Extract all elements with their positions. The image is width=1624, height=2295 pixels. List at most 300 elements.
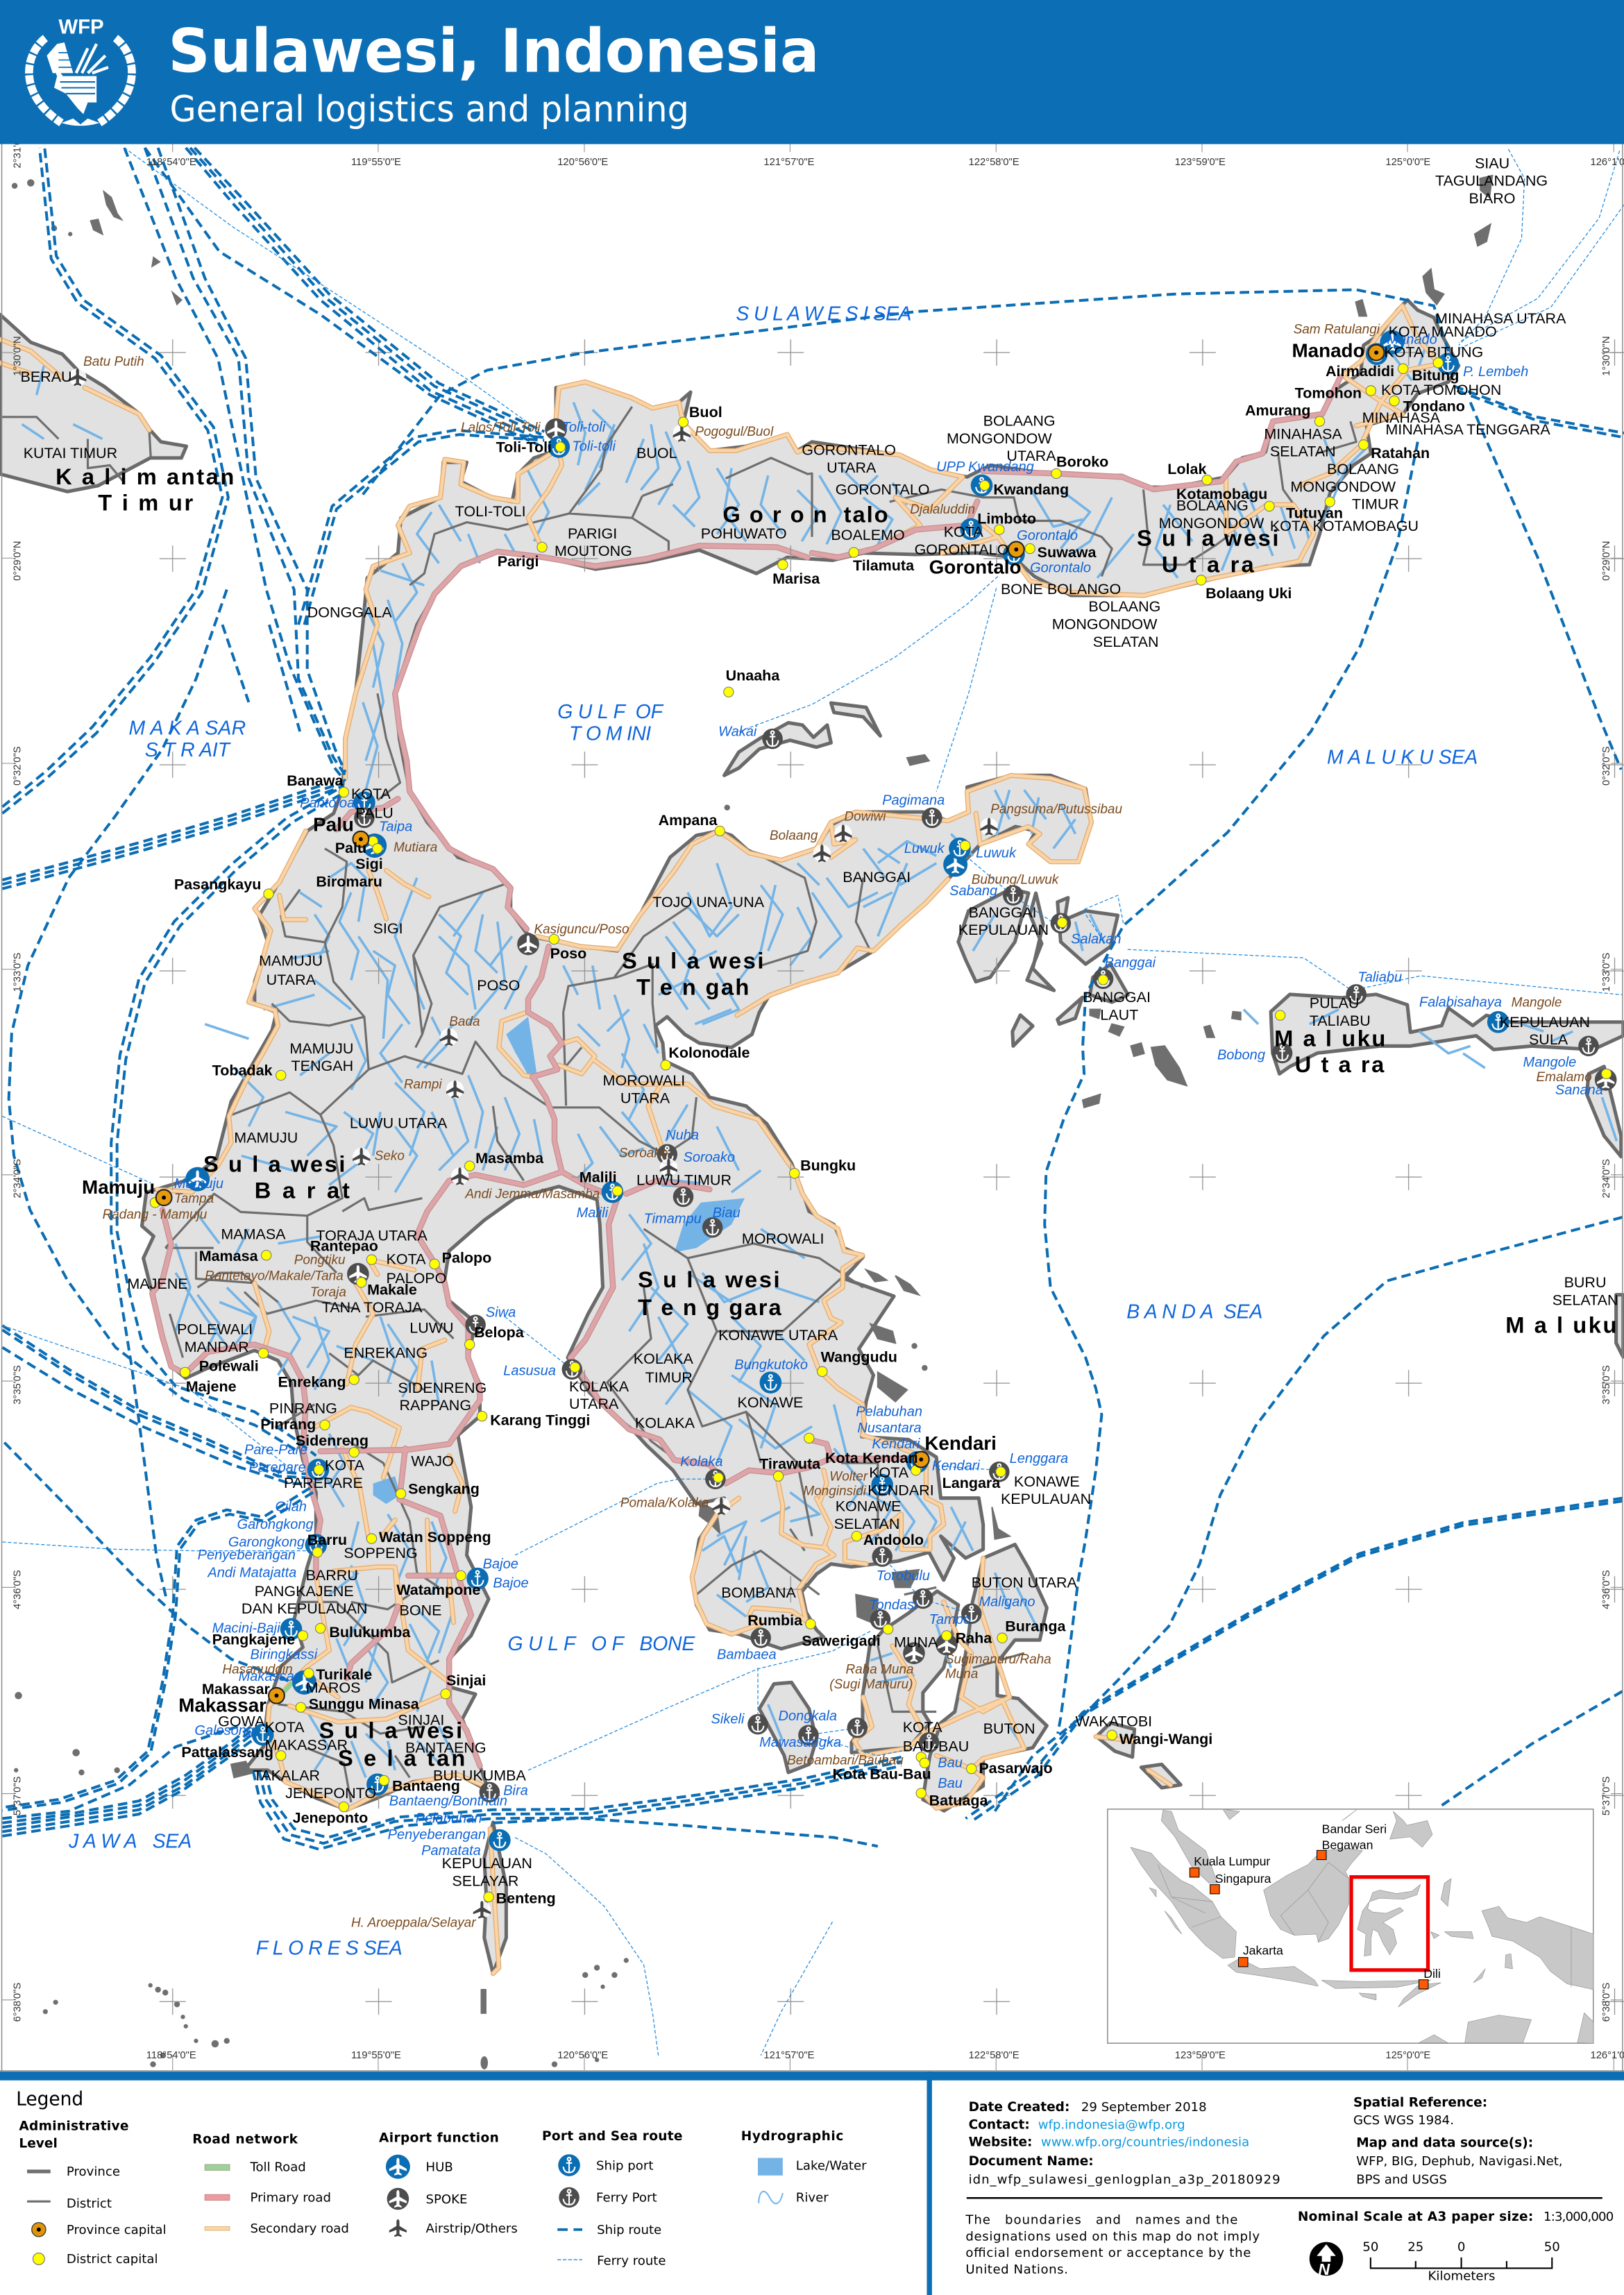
port labels: Biringkassi <box>250 1648 318 1663</box>
inset red extent box <box>1351 1877 1428 1970</box>
airport labels: H. Aroeppala/Selayar <box>351 1915 476 1930</box>
district labels: MAROS <box>306 1679 360 1696</box>
town labels: Langara <box>942 1475 1001 1491</box>
inset labels: Begawan <box>1322 1838 1373 1852</box>
graticule labels: 121°57'0"E <box>763 157 815 168</box>
district labels: MOROWALI <box>603 1072 685 1089</box>
graticule labels: 2°34'0"S <box>12 1159 24 1199</box>
town labels: Rantepao <box>310 1237 378 1254</box>
contact: Contact: <box>969 2117 1030 2132</box>
port labels: Manado <box>1387 332 1437 347</box>
airport labels: Kasiguncu/Poso <box>534 922 629 937</box>
district labels: WAKATOBI <box>1075 1713 1152 1730</box>
graticule labels: 125°0'0"E <box>1385 157 1430 168</box>
airport labels: Rantetayo/Makale/Tana <box>205 1269 344 1284</box>
graticule labels: 1°33'0"S <box>1601 953 1612 992</box>
spatial reference: GCS WGS 1984. <box>1353 2113 1454 2128</box>
data sources <box>1356 2136 1563 2187</box>
legend: hydrographic: Lake/Water <box>796 2158 867 2173</box>
port labels: Toli-toli <box>572 439 616 454</box>
district labels: GORONTALO <box>915 541 1008 558</box>
port labels <box>174 332 1603 1858</box>
district labels: MINAHASA UTARA <box>1435 310 1566 327</box>
port labels: Lasusua <box>503 1364 556 1379</box>
province names: T e n g gara <box>638 1294 782 1320</box>
ship ports <box>252 343 1509 1851</box>
legend heading: Legend <box>16 2089 83 2110</box>
port labels: Nusantara <box>857 1421 922 1436</box>
district labels: BANGGAI <box>1083 989 1151 1006</box>
district labels: PINRANG <box>269 1400 337 1416</box>
district labels: MONGONDOW <box>1052 616 1158 632</box>
town labels: Batuaga <box>929 1792 989 1809</box>
hub airports <box>185 330 1404 1695</box>
legend: road network: Toll Road <box>249 2160 306 2174</box>
date created <box>969 2100 1207 2115</box>
port labels: P. Lembeh <box>1463 364 1528 380</box>
town labels: Pasangkayu <box>174 876 261 893</box>
district labels: LAUT <box>1100 1006 1138 1023</box>
district labels: GOWA <box>218 1713 265 1730</box>
town labels: Unaaha <box>726 667 780 684</box>
district labels: PALOPO <box>387 1270 446 1287</box>
town labels: Sawerigadi <box>802 1633 881 1650</box>
district labels: MONGONDOW <box>1290 478 1396 495</box>
district labels: MINAHASA TENGGARA <box>1385 421 1550 438</box>
province names: S e l a tan <box>338 1745 465 1770</box>
town labels: Malili <box>580 1169 617 1185</box>
data sources: WFP, BIG, Dephub, Navigasi.Net, <box>1356 2154 1563 2169</box>
town labels: Andoolo <box>863 1532 924 1548</box>
port labels: Makassar <box>239 1669 300 1684</box>
district labels: TIMUR <box>1352 496 1399 513</box>
town labels: Belopa <box>474 1324 525 1341</box>
port labels: Timampu <box>644 1211 702 1226</box>
graticule labels: 122°58'0"E <box>969 157 1020 168</box>
document name <box>969 2154 1280 2187</box>
airport labels: Monginsidi <box>803 1484 867 1498</box>
town labels: Karang Tinggi <box>490 1412 590 1428</box>
port labels: Luwuk <box>904 841 945 856</box>
town labels: Rumbia <box>747 1612 803 1629</box>
district and province boundaries <box>0 407 1356 1802</box>
district labels: BONE BOLANGO <box>1001 581 1121 598</box>
sea names: B A N D A SEA <box>1126 1301 1262 1323</box>
district labels: MONGONDOW <box>1159 515 1264 532</box>
sea names: M A L U K U SEA <box>1327 746 1478 768</box>
town labels: Amurang <box>1245 403 1310 419</box>
district labels: KOTA <box>387 1251 426 1267</box>
town labels: Buranga <box>1005 1618 1067 1635</box>
port labels: Siwa <box>486 1305 516 1320</box>
graticule labels: 122°58'0"E <box>969 2050 1020 2061</box>
district labels: TORAJA UTARA <box>316 1228 428 1244</box>
inset labels: Dili <box>1423 1967 1441 1981</box>
airport labels: Muna <box>945 1667 978 1682</box>
icon: WFP logo: WFP <box>58 15 104 38</box>
district labels: BONE <box>400 1602 441 1618</box>
data sources: BPS and USGS <box>1356 2172 1447 2187</box>
town labels: Palu <box>335 840 366 856</box>
district labels: KOLAKA <box>635 1415 695 1432</box>
port labels: Soroako <box>683 1150 735 1165</box>
district labels: MANDAR <box>185 1339 249 1355</box>
town labels: Polewali <box>199 1357 259 1374</box>
province names: U t a ra <box>1295 1051 1385 1077</box>
legend: airport function: SPOKE <box>425 2192 467 2207</box>
graticule labels: 1°33'0"S <box>12 953 24 992</box>
inset land <box>1131 1809 1593 2043</box>
scale bar <box>1362 2239 1560 2283</box>
town labels: Buol <box>689 404 722 421</box>
district labels: MUNA <box>894 1634 938 1651</box>
subtitle: General logistics and planning <box>170 89 689 130</box>
port labels: Pelabuhan <box>416 1811 482 1827</box>
province names: M a l uku <box>1505 1312 1616 1337</box>
legend: administrative level: Level <box>19 2137 58 2151</box>
town labels: Bitung <box>1412 367 1459 384</box>
town labels: Tutuyan <box>1286 505 1343 521</box>
port labels: Dongkala <box>779 1709 837 1724</box>
district labels: PANGKAJENE <box>255 1583 354 1600</box>
airport labels: Wolter <box>829 1469 868 1484</box>
legend: port and sea route: Ship route <box>597 2223 661 2237</box>
town labels: Bungku <box>800 1157 856 1174</box>
title: Sulawesi, Indonesia <box>168 17 820 86</box>
nominal scale: 1:3,000,000 <box>1543 2210 1614 2224</box>
port labels: Nuha <box>666 1128 699 1143</box>
scale bar: 0 <box>1457 2239 1465 2254</box>
district labels: MINAHASA <box>1264 425 1342 442</box>
town labels: Majene <box>186 1378 237 1395</box>
disclaimer: official endorsement or acceptance by the <box>965 2246 1251 2260</box>
airport labels: Raha Muna <box>845 1663 914 1677</box>
graticule labels: 1°30'0"N <box>12 336 24 376</box>
port labels: Banggai <box>1105 955 1156 970</box>
district labels: SULA <box>1529 1031 1568 1048</box>
district labels: SELATAN <box>1093 634 1159 650</box>
district labels: SINJAI <box>398 1711 444 1728</box>
port labels: Bobong <box>1217 1047 1265 1062</box>
town labels: Limboto <box>977 511 1036 527</box>
port labels: Galesong <box>194 1723 254 1738</box>
province capital labels: Palu <box>313 813 354 835</box>
graticule labels: 118°54'0"E <box>146 2050 196 2061</box>
airport labels: Pomala/Kolaka <box>620 1496 709 1510</box>
town labels: Pinrang <box>260 1416 316 1433</box>
graticule labels: 2°31'0"N <box>12 128 24 168</box>
district labels: KOTA TOMOHON <box>1381 382 1501 398</box>
sea names: M A K A SAR <box>129 717 246 739</box>
district labels: BULUKUMBA <box>433 1768 526 1784</box>
district labels: BOMBANA <box>721 1584 796 1601</box>
inset labels: Jakarta <box>1243 1943 1283 1957</box>
town labels: Wanggudu <box>821 1349 897 1366</box>
port labels: Pamatata <box>421 1843 481 1858</box>
district labels: PAREPARE <box>284 1475 363 1491</box>
port labels: Luwuk <box>976 845 1017 861</box>
district labels: POSO <box>477 977 520 994</box>
district labels: SELATAN <box>834 1516 899 1532</box>
town labels: Sigi <box>355 856 383 872</box>
graticule labels: 4°36'0"S <box>12 1570 24 1609</box>
district labels: KOTA MANADO <box>1389 323 1497 340</box>
port labels: Tampo <box>929 1612 971 1627</box>
district labels: BUTON <box>983 1720 1035 1737</box>
legend: airport function: Airport function <box>379 2131 499 2145</box>
port labels: Malili <box>577 1205 609 1221</box>
town labels: Sidenreng <box>296 1432 369 1449</box>
panel: legend <box>16 2089 867 2268</box>
port labels: Pelabuhan <box>856 1405 922 1420</box>
rivers <box>22 344 1616 1777</box>
port labels: Kolaka <box>680 1454 722 1469</box>
sea names: F L O R E S SEA <box>256 1937 403 1959</box>
district labels: LUWU TIMUR <box>636 1172 731 1189</box>
town labels: Banawa <box>287 772 344 789</box>
town labels: Tondano <box>1403 398 1465 414</box>
district labels: KONAWE <box>836 1498 902 1515</box>
district labels: KEPULAUAN <box>1001 1491 1091 1507</box>
district labels: POHUWATO <box>701 525 787 542</box>
airport labels: Emalamo <box>1537 1070 1592 1085</box>
legend: port and sea route <box>542 2129 682 2268</box>
airport labels: Toraja <box>310 1285 346 1300</box>
district labels: MONGONDOW <box>947 430 1052 447</box>
district labels: BAU-BAU <box>903 1738 969 1754</box>
graticule labels: 123°59'0"E <box>1175 157 1226 168</box>
district labels: BOLAANG <box>1327 461 1399 477</box>
district labels: MOROWALI <box>742 1230 824 1247</box>
district labels: DONGGALA <box>307 604 392 621</box>
inset locator map <box>1108 1809 1593 2043</box>
district labels: DAN KEPULAUAN <box>242 1600 367 1617</box>
district labels: UTARA <box>569 1396 619 1412</box>
inset labels <box>1194 1822 1441 1981</box>
district labels: KOTA KOTAMOBAGU <box>1270 518 1419 534</box>
airport labels: (Sugi Manuru) <box>829 1677 913 1692</box>
district labels: UTARA <box>267 972 316 988</box>
airport labels: Betoambari/Baubau <box>787 1753 904 1768</box>
inset capital markers <box>1190 1850 1428 1989</box>
district labels: KOLAKA <box>569 1378 629 1395</box>
district labels: WAJO <box>411 1453 454 1469</box>
graticule labels: 120°56'0"E <box>557 157 608 168</box>
port labels: Penyeberangan <box>388 1827 486 1843</box>
port labels: Kendari <box>932 1459 980 1474</box>
town labels: Mamasa <box>199 1248 259 1264</box>
town labels: Bulukumba <box>329 1624 411 1641</box>
town labels: Parigi <box>498 553 539 570</box>
town labels: Masamba <box>475 1150 544 1167</box>
legend: administrative level: Province <box>67 2165 120 2179</box>
port labels: Mamuju <box>174 1176 223 1192</box>
province names: B a r at <box>255 1178 350 1203</box>
legend: hydrographic <box>741 2129 867 2205</box>
district labels: MAJENE <box>127 1276 188 1292</box>
district labels: BOALEMO <box>831 527 905 543</box>
port labels: Parepare <box>248 1460 306 1475</box>
legend: airport function: Airstrip/Others <box>425 2221 518 2236</box>
district labels: MOUTONG <box>555 543 632 559</box>
airport labels: Hasanuddin <box>222 1663 293 1677</box>
port labels: Maligano <box>979 1595 1035 1610</box>
graticule labels: 120°56'0"E <box>557 2050 608 2061</box>
town labels: Pattalassang <box>181 1744 273 1761</box>
disclaimer <box>965 2212 1260 2277</box>
town labels: Palopo <box>442 1249 491 1266</box>
document name: idn_wfp_sulawesi_genlogplan_a3p_20180929 <box>969 2172 1280 2187</box>
district labels: KENDARI <box>868 1482 934 1498</box>
province names: U t a ra <box>1162 551 1254 577</box>
scale bar: 50 <box>1544 2239 1560 2254</box>
town labels: Poso <box>550 945 586 962</box>
scale bar: Kilometers <box>1428 2269 1495 2283</box>
port labels: Mawasangka <box>759 1735 841 1750</box>
district labels <box>21 155 1618 1889</box>
town labels: Benteng <box>496 1890 556 1907</box>
airstrips <box>69 369 998 1919</box>
province names: T i m ur <box>98 490 194 516</box>
district labels: KONAWE <box>737 1394 803 1411</box>
port labels: Penyeberangan <box>198 1548 296 1563</box>
airport labels: Bubung/Luwuk <box>972 872 1060 887</box>
town labels: Tomohon <box>1295 384 1362 401</box>
town labels: Boroko <box>1056 453 1108 470</box>
port labels: Mangole <box>1523 1055 1576 1070</box>
district labels: ENREKANG <box>344 1344 428 1361</box>
ship routes <box>2 148 1624 1849</box>
legend: port and sea route: Port and Sea route <box>542 2129 682 2144</box>
airport labels: Bolaang <box>770 829 818 843</box>
province capital labels: Makassar <box>178 1694 267 1716</box>
district labels: UTARA <box>827 459 877 476</box>
graticule labels: 6°38'0"S <box>12 1983 24 2022</box>
port labels: Bajoe <box>483 1557 518 1572</box>
district labels: JENEPONTO <box>285 1785 376 1802</box>
nominal scale: Nominal Scale at A3 paper size: <box>1298 2210 1533 2224</box>
district labels: SIAU <box>1475 155 1509 171</box>
airport labels: Andi Jemma/Masamba <box>464 1187 600 1202</box>
district labels: MAMASA <box>221 1226 286 1243</box>
town labels: Watan Soppeng <box>379 1529 491 1545</box>
district labels: MINAHASA <box>1362 409 1441 426</box>
graticule labels: 119°55'0"E <box>351 157 401 168</box>
airport labels: Radang - Mamuju <box>103 1208 208 1222</box>
graticule labels: 4°36'0"S <box>1601 1570 1612 1609</box>
district labels: KUTAI TIMUR <box>24 445 117 461</box>
airport labels: Djalaluddin <box>910 502 975 517</box>
sea names: G U L F O F BONE <box>508 1633 695 1655</box>
sea names: G U L F OF <box>557 701 664 723</box>
district labels: KEPULAUAN <box>442 1855 532 1872</box>
contact <box>969 2117 1185 2132</box>
sea names <box>68 303 1478 1959</box>
Sulawesi mainland <box>142 300 1459 1810</box>
legend: road network: Secondary road <box>250 2221 349 2236</box>
footer band <box>0 2072 1624 2081</box>
legend: administrative level: District capital <box>67 2252 158 2267</box>
town labels: Kolonodale <box>668 1044 750 1061</box>
port labels: Bambaea <box>717 1648 777 1663</box>
port labels: Pantoloan <box>300 796 362 811</box>
airport labels: Lalos/Toli-Toli <box>461 421 541 435</box>
airport labels: Soroako <box>619 1146 668 1161</box>
airport labels <box>83 323 1592 1930</box>
district capitals <box>150 358 1612 1902</box>
legend: port and sea route: Ferry route <box>597 2253 666 2268</box>
graticule labels: 123°59'0"E <box>1175 2050 1226 2061</box>
town labels: Tirawuta <box>759 1456 821 1473</box>
graticule labels: 0°29'0"N <box>12 541 24 581</box>
port labels: Garongkong <box>237 1517 314 1532</box>
inset labels: Bandar Seri <box>1322 1822 1387 1836</box>
scale bar: 50 <box>1362 2239 1378 2254</box>
port labels: Lenggara <box>1010 1451 1068 1466</box>
district labels: KOTA <box>944 524 983 541</box>
province names: K a l i m antan <box>56 464 234 489</box>
town labels: Sinjai <box>446 1672 486 1689</box>
district labels: TIMUR <box>645 1369 693 1386</box>
graticule labels: 5°37'0"S <box>12 1776 24 1815</box>
inset labels: Singapura <box>1215 1872 1271 1886</box>
district labels: SIGI <box>373 920 403 937</box>
district labels: MAKASSAR <box>265 1736 348 1753</box>
district labels: BERAU <box>21 369 72 385</box>
date created: 29 September 2018 <box>1081 2100 1207 2115</box>
town labels: Sunggu Minasa <box>309 1695 420 1712</box>
province capital labels: Manado <box>1292 339 1365 361</box>
port labels: Sikeli <box>711 1711 745 1727</box>
sea names: T O M INI <box>569 723 651 745</box>
town labels <box>174 363 1465 1907</box>
district labels: PULAU <box>1310 994 1359 1011</box>
district labels: LUWU <box>409 1319 454 1336</box>
town labels: Suwawa <box>1038 544 1097 561</box>
graticule labels: 125°0'0"E <box>1385 2050 1430 2061</box>
legend: airport function: HUB <box>425 2160 453 2174</box>
airport labels: Seko <box>375 1149 405 1164</box>
province names: S u l a wesi <box>622 948 763 974</box>
port labels: Gorontalo <box>1030 560 1091 575</box>
graticule labels: 1°30'0"N <box>1601 336 1612 376</box>
district labels: BUOL <box>636 445 677 461</box>
port labels: Gorontalo <box>1017 528 1078 543</box>
town labels: Makassar <box>202 1681 271 1697</box>
port labels: Cilah <box>275 1500 307 1515</box>
town labels: Pasarwajo <box>979 1760 1053 1777</box>
port labels: Toli-toli <box>562 420 606 435</box>
district labels: SOPPENG <box>344 1545 418 1561</box>
district labels: TENGAH <box>291 1058 353 1074</box>
legend: administrative level: District <box>67 2196 112 2211</box>
primary roads <box>152 378 1340 1765</box>
town labels: Watampone <box>396 1582 480 1598</box>
district labels: BURU <box>1564 1274 1606 1291</box>
legend: hydrographic: Hydrographic <box>741 2129 843 2144</box>
province names: M a l uku <box>1274 1025 1385 1051</box>
document name: Document Name: <box>969 2154 1094 2169</box>
graticule labels: 6°38'0"S <box>1601 1983 1612 2022</box>
sea names: S T R AIT <box>145 739 232 761</box>
date created: Date Created: <box>969 2100 1069 2115</box>
port labels: Kendari <box>872 1437 920 1452</box>
disclaimer: The boundaries and names and the <box>965 2212 1237 2227</box>
town labels: Bolaang Uki <box>1206 585 1292 602</box>
port labels: Bajoe <box>493 1575 529 1591</box>
district labels: PALU <box>355 804 394 821</box>
town labels: Ampana <box>659 812 718 829</box>
